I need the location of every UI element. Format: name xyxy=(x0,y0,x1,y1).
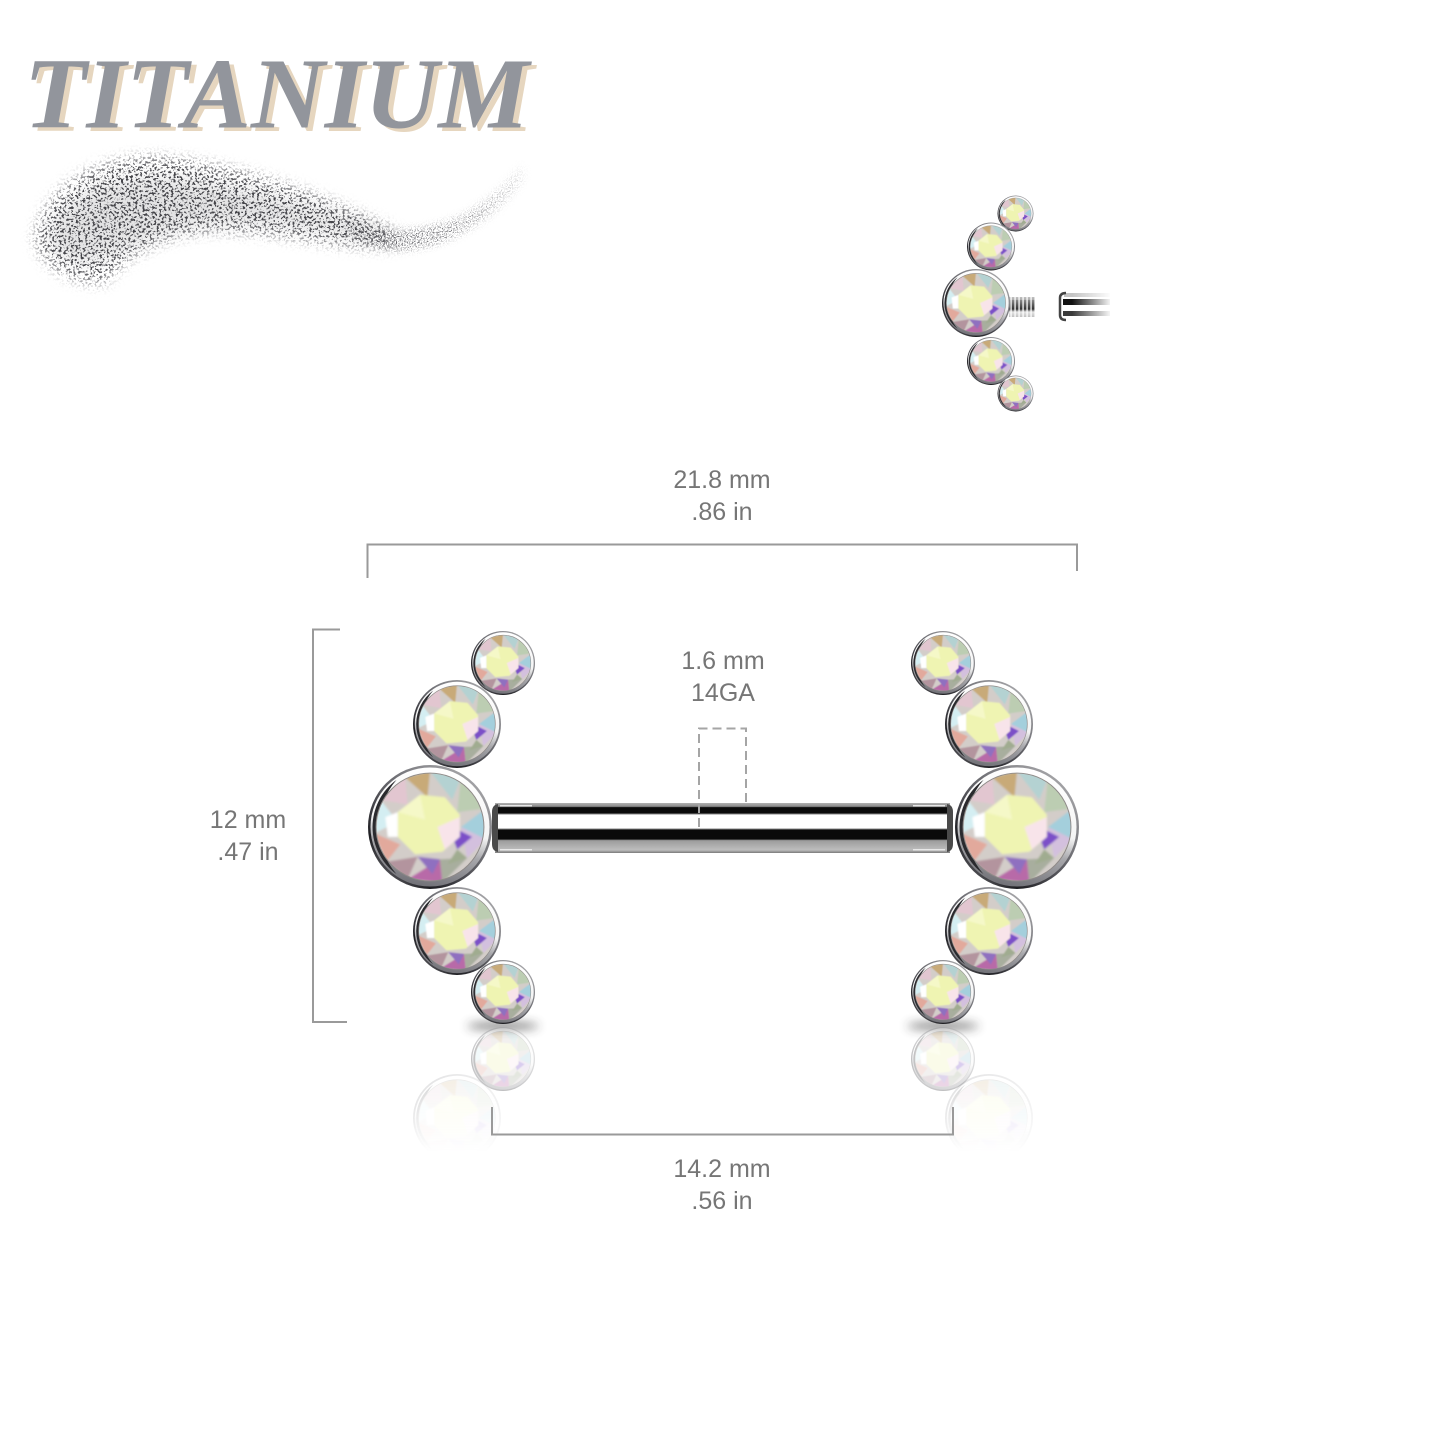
gem: top medium xyxy=(967,222,1015,270)
reflections of lower gems xyxy=(413,1027,1033,1136)
gem: large right xyxy=(955,765,1079,889)
gem: medium upper left xyxy=(413,680,501,768)
gem: medium lower right xyxy=(945,887,1033,975)
dimension: gauge: 14GA xyxy=(691,679,755,707)
dimension: overall height xyxy=(210,630,347,1022)
gem: centre large xyxy=(942,269,1010,337)
gauge dashed marker xyxy=(699,728,746,827)
title: TITANIUM: TITANIUM xyxy=(24,38,532,150)
floor shadows xyxy=(467,1022,979,1030)
barbell shaft xyxy=(492,803,953,853)
dimension: inner length xyxy=(492,1107,953,1215)
dimension: overall height: 12 mm xyxy=(210,806,286,834)
dimension: overall width xyxy=(368,466,1077,578)
small exploded view: curved gem cluster with threaded pin xyxy=(942,196,1112,412)
gem: bottom small xyxy=(998,376,1034,412)
dimension: inner length: .56 in xyxy=(691,1187,753,1215)
gem: top small xyxy=(998,196,1034,232)
gem: bottom medium xyxy=(967,337,1015,385)
right gem cluster xyxy=(911,631,1079,1024)
infographic canvas xyxy=(26,61,1110,1209)
title: TITANIUM: TITANIUM xyxy=(29,41,537,153)
dimension: overall width: .86 in xyxy=(691,498,753,526)
dimension: overall height: .47 in xyxy=(217,838,279,866)
bar end piece xyxy=(1060,290,1112,323)
dimension: gauge xyxy=(681,647,765,707)
left gem cluster xyxy=(368,631,535,1024)
titanium dust swoosh xyxy=(36,158,524,283)
gem: large left xyxy=(368,765,492,889)
gem: medium upper right xyxy=(945,680,1033,768)
dimension: inner length: 14.2 mm xyxy=(673,1155,771,1183)
dimension: gauge: 1.6 mm xyxy=(681,647,765,675)
gem: small lower right xyxy=(911,960,975,1024)
dimension: overall width: 21.8 mm xyxy=(673,466,771,494)
gem: medium lower left xyxy=(413,887,501,975)
gem: small lower left xyxy=(471,960,535,1024)
gem: small upper left xyxy=(471,631,535,695)
threaded pin xyxy=(1009,297,1035,317)
gem: small upper right xyxy=(911,631,975,695)
